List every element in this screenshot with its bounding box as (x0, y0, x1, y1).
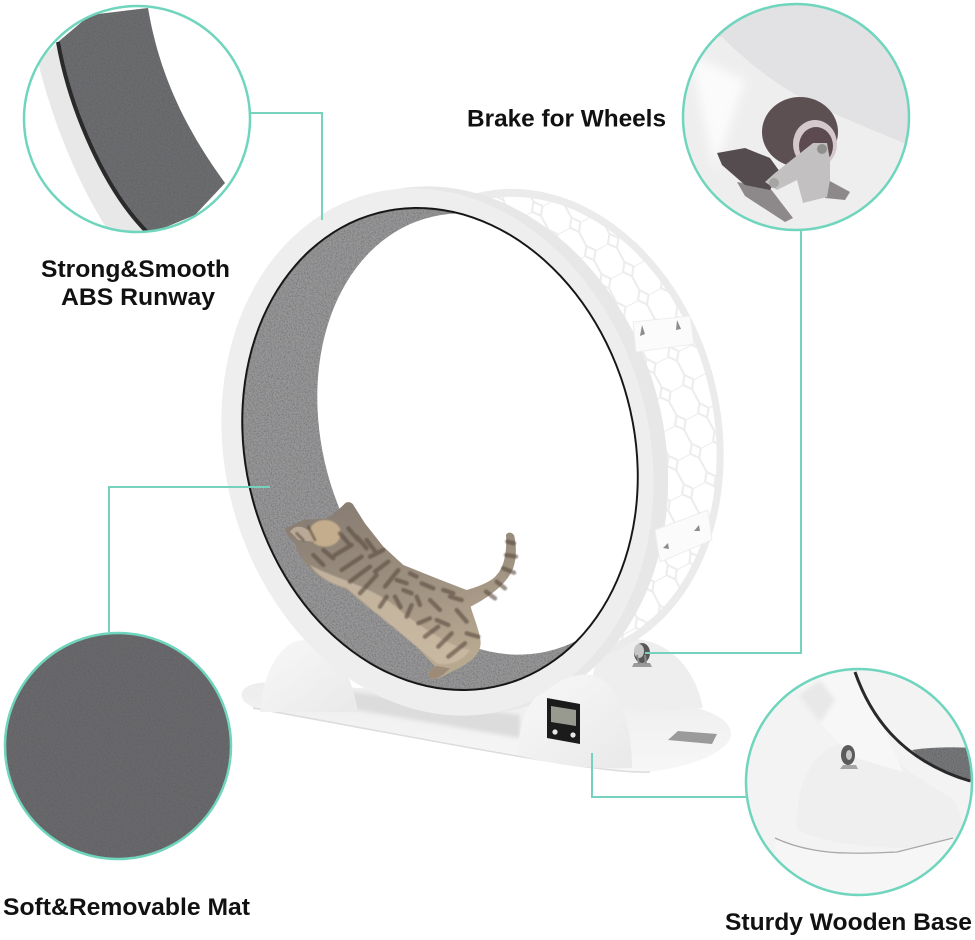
rim band (39, 44, 142, 231)
drum mounting bracket lower (655, 510, 712, 562)
wheel opening (317, 214, 637, 655)
wheel drum with honeycomb shell (178, 137, 773, 763)
black inner edge of rim (188, 162, 692, 736)
caster wheel (632, 643, 652, 667)
caster (840, 745, 858, 769)
mounting plate (737, 182, 793, 222)
label: soft and removable mat: Soft&Removable Mat (3, 894, 250, 921)
inset: carpet mat texture (5, 633, 231, 859)
sensor strip on base (668, 731, 717, 744)
grey carpet runway (191, 164, 689, 734)
label: sturdy wooden base: Sturdy Wooden Base (725, 909, 972, 936)
carpet band (58, 8, 225, 235)
plate front (775, 838, 953, 900)
cat face (309, 520, 341, 547)
cat tabby stripes (297, 527, 516, 657)
grey mat wedge (912, 747, 975, 783)
left foot dome (260, 640, 358, 712)
cat belly highlight (310, 565, 470, 664)
shadow under rim (340, 690, 520, 738)
fork bracket (765, 143, 830, 203)
back right foot dome (587, 639, 703, 712)
drum edge (798, 665, 903, 772)
lock lever (717, 148, 780, 190)
rubber wheel (762, 97, 838, 167)
label: strong and smooth ABS runway (41, 256, 230, 311)
front right foot dome (517, 674, 632, 768)
black arc (855, 672, 970, 781)
label: brake for wheels: Brake for Wheels (467, 106, 666, 132)
base dome (797, 742, 970, 848)
black edge (58, 42, 147, 232)
leader lines (109, 113, 801, 797)
timer display (547, 698, 580, 744)
front rim of wheel (164, 139, 711, 765)
label: strong and smooth ABS runway: ABS Runway (61, 284, 216, 311)
base plate of the wheel (242, 639, 731, 772)
cat hind foot (429, 666, 450, 679)
inset: wooden base detail (740, 660, 975, 900)
drum mounting bracket upper (633, 316, 694, 352)
label: strong and smooth ABS runway: Strong&Smooth (41, 256, 230, 283)
plate edge (775, 838, 953, 853)
inset: brake caster detail (680, 0, 920, 240)
band next to front rim (178, 137, 726, 763)
cat running on the mat (285, 502, 516, 679)
inset: runway detail (20, 0, 260, 240)
